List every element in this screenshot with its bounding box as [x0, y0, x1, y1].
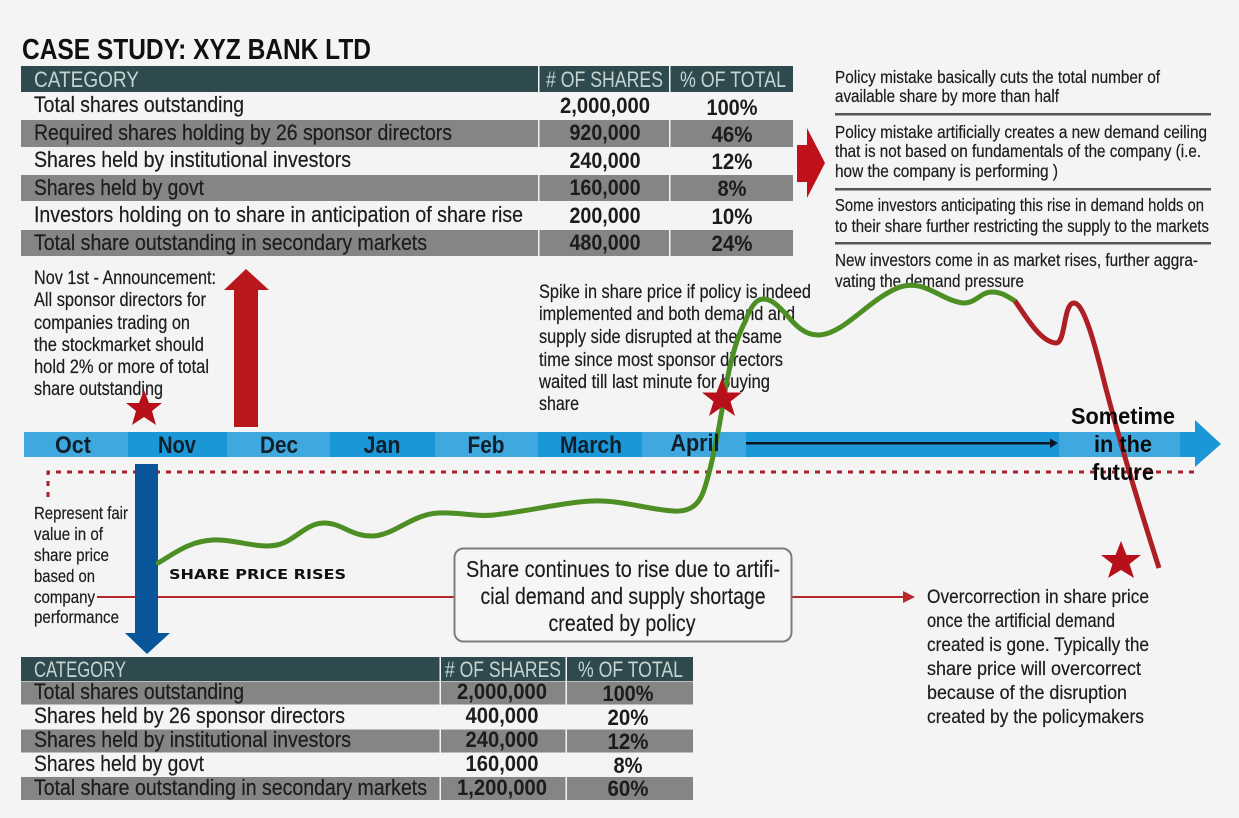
table: after policy impact: Shares held by institutional investors — [34, 727, 351, 752]
table: before policy impact: 160,000 — [570, 175, 640, 200]
arrow: red up arrow — [224, 269, 269, 427]
table: after policy impact: # OF SHARES — [445, 657, 561, 682]
table: after policy impact: 1,200,000 — [457, 775, 547, 800]
timeline month labels: April — [670, 430, 720, 457]
table: before policy impact: 920,000 — [570, 120, 640, 145]
line: red connector through callout — [97, 591, 915, 603]
table: before policy impact: 46% — [712, 122, 752, 147]
text block: fair value explanation: Represent fair — [34, 503, 128, 523]
table: before policy impact: 100% — [706, 95, 758, 120]
table: before policy impact: 2,000,000 — [560, 93, 650, 118]
label: sometime in the future — [1071, 403, 1175, 485]
text block: fair value explanation: performance — [34, 607, 119, 627]
table: before policy impact: 480,000 — [570, 230, 640, 255]
label: sometime in the future: in the — [1094, 431, 1152, 457]
table: after policy impact: 60% — [608, 776, 648, 801]
callout: artificial demand: Share continues to rise due to artifi- — [466, 556, 780, 582]
text block: fair value explanation — [34, 503, 128, 627]
table: before policy impact: % OF TOTAL — [680, 67, 786, 92]
table: after policy impact: Shares held by 26 sponsor directors — [34, 703, 345, 728]
table: after policy impact: 400,000 — [466, 703, 538, 728]
table: before policy impact: Investors holding on to share in anticipation of share rise — [34, 202, 523, 227]
table: after policy impact: % OF TOTAL — [578, 657, 683, 682]
callout: artificial demand: created by policy — [548, 610, 696, 636]
arrow: black arrow along timeline — [746, 438, 1058, 448]
table: after policy impact: 240,000 — [466, 727, 538, 752]
callout: artificial demand — [454, 548, 792, 642]
table: before policy impact: Shares held by institutional investors — [34, 147, 351, 172]
text block: policy mistake notes: vating the demand pressure — [835, 271, 1024, 291]
text block: fair value explanation: based on — [34, 566, 95, 586]
text block: overcorrection: because of the disruption — [927, 682, 1127, 704]
timeline month labels: Dec — [260, 432, 298, 459]
label: sometime in the future: Sometime — [1071, 403, 1175, 429]
table: after policy impact: Total shares outstanding — [34, 679, 244, 704]
timeline month labels: Feb — [468, 432, 504, 459]
text block: price spike note: implemented and both demand and — [539, 304, 795, 325]
timeline month labels — [55, 430, 720, 459]
text block: overcorrection: created is gone. Typically the — [927, 634, 1149, 656]
text block: policy mistake notes — [835, 67, 1211, 291]
text block: policy mistake notes: available share by more than half — [835, 86, 1059, 106]
table: after policy impact: 100% — [602, 681, 654, 706]
text block: price spike note: time since most sponsor directors — [539, 350, 783, 371]
text block: policy mistake notes: how the company is performing ) — [835, 161, 1058, 181]
icon: star April — [702, 378, 742, 416]
text block: November announcement: share outstanding — [34, 379, 163, 400]
text block: price spike note — [538, 282, 811, 415]
arrow: red right arrow to policy notes — [797, 128, 825, 198]
table: before policy impact: CATEGORY — [34, 67, 139, 92]
icon: star overcorrection — [1101, 541, 1141, 578]
text block: price spike note: supply side disrupted at the same — [539, 327, 782, 348]
table: after policy impact: 8% — [614, 753, 642, 778]
text block: overcorrection: share price will overcorrect — [927, 658, 1142, 680]
table: before policy impact: # OF SHARES — [546, 67, 663, 92]
chart line: share price rises (green) — [158, 285, 1015, 563]
table: after policy impact: Shares held by govt — [34, 751, 204, 776]
text block: fair value explanation: value in of — [34, 524, 103, 544]
text block: price spike note: waited till last minute for buying — [538, 372, 770, 393]
text block: policy mistake notes: New investors come in as market rises, further aggra- — [835, 250, 1198, 270]
chart line: overcorrection (red) — [1015, 301, 1159, 568]
timeline month labels: Oct — [55, 432, 91, 459]
label: sometime in the future: future — [1092, 459, 1154, 485]
table: after policy impact: Total share outstanding in secondary markets — [34, 775, 427, 800]
table: before policy impact: 12% — [712, 149, 752, 174]
dotted line: fair value — [48, 472, 1196, 497]
timeline month labels: Nov — [158, 432, 197, 459]
text block: November announcement: Nov 1st - Announcement: — [34, 268, 216, 289]
icon: star November — [126, 390, 162, 425]
table: before policy impact — [21, 66, 793, 256]
text block: fair value explanation: company — [34, 587, 95, 607]
table: before policy impact: 10% — [712, 204, 752, 229]
table: before policy impact: 24% — [712, 231, 752, 256]
text block: overcorrection: created by the policymakers — [927, 706, 1144, 728]
table: after policy impact: 12% — [608, 729, 648, 754]
text block: November announcement: All sponsor directors for — [34, 290, 207, 311]
table: after policy impact: 2,000,000 — [457, 679, 547, 704]
text block: overcorrection: Overcorrection in share price — [927, 586, 1149, 608]
table: before policy impact: 8% — [718, 176, 746, 201]
text block: overcorrection: once the artificial demand — [927, 610, 1115, 632]
text block: price spike note: share — [539, 394, 579, 415]
text block: November announcement — [34, 268, 216, 400]
table: before policy impact: Total shares outstanding — [34, 92, 244, 117]
table: before policy impact: Required shares holding by 26 sponsor directors — [34, 120, 452, 145]
text block: November announcement: the stockmarket should — [34, 335, 204, 356]
callout: artificial demand: cial demand and supply shortage — [480, 583, 766, 609]
text block: policy mistake notes: Policy mistake basically cuts the total number of — [835, 67, 1160, 87]
title: CASE STUDY: XYZ BANK LTD — [22, 34, 371, 66]
text block: fair value explanation: share price — [34, 545, 109, 565]
text block: overcorrection — [927, 586, 1149, 728]
table: after policy impact — [21, 657, 693, 801]
table: before policy impact: 240,000 — [570, 148, 640, 173]
timeline month labels: Jan — [364, 432, 400, 459]
table: before policy impact: Total share outstanding in secondary markets — [34, 230, 427, 255]
table: after policy impact: 20% — [608, 705, 648, 730]
timeline bar — [24, 420, 1221, 467]
text block: November announcement: companies trading on — [34, 313, 190, 334]
label: share price rises: SHARE PRICE RISES — [169, 567, 346, 583]
table: after policy impact: CATEGORY — [34, 657, 126, 682]
text block: November announcement: hold 2% or more of total — [34, 357, 209, 378]
arrow: blue down arrow — [125, 464, 170, 654]
text block: price spike note: Spike in share price if policy is indeed — [539, 282, 811, 303]
table: after policy impact: 160,000 — [466, 751, 538, 776]
table: before policy impact: 200,000 — [570, 203, 640, 228]
table: before policy impact: Shares held by govt — [34, 175, 204, 200]
timeline month labels: March — [560, 432, 622, 459]
